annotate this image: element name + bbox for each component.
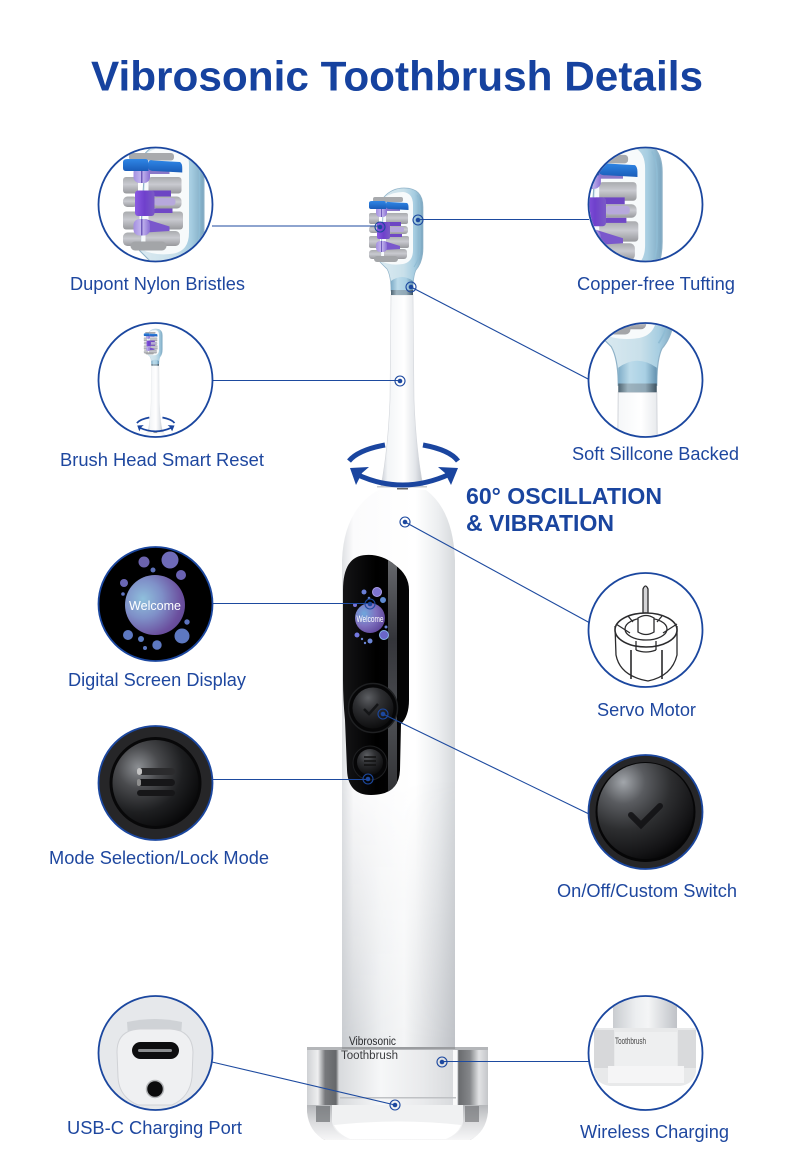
panel: usb-c charging port: USB-C Charging Port	[67, 1118, 242, 1138]
panel: on/off/custom switch: On/Off/Custom Switch	[557, 881, 737, 901]
brand text	[341, 1036, 398, 1062]
handle	[342, 490, 455, 1050]
panel: usb-c charging port	[67, 996, 242, 1138]
oscillation heading: 60° OSCILLATION	[466, 483, 662, 509]
brush stem	[377, 295, 427, 490]
panel: dupont nylon bristles: Dupont Nylon Bristles	[70, 274, 245, 294]
panel: servo motor	[588, 573, 702, 720]
panel: wireless charging: Wireless Charging	[580, 1122, 729, 1142]
panel: digital screen display	[68, 547, 246, 690]
panel: brush head smart reset: Brush Head Smart Reset	[60, 450, 264, 470]
screen welcome graphic	[353, 588, 388, 644]
panel: soft silicone backed	[572, 322, 738, 460]
brand text: Vibrosonic	[349, 1036, 396, 1048]
screen welcome graphic: Welcome	[356, 614, 384, 625]
panel: mode selection / lock mode: Mode Selection/Lock Mode	[49, 848, 269, 868]
panel: on/off/custom switch	[557, 755, 737, 901]
brand text: Toothbrush	[341, 1050, 398, 1062]
panel: wireless charging: Toothbrush	[615, 1036, 646, 1047]
toothbrush	[307, 188, 488, 1140]
panel: soft silicone backed: Soft Sillcone Backed	[572, 444, 739, 464]
panel: brush head smart reset	[62, 322, 264, 466]
oscillation heading: & VIBRATION	[466, 510, 614, 536]
panel: mode selection / lock mode	[49, 726, 269, 868]
panel: wireless charging	[580, 995, 729, 1142]
panel: servo motor: Servo Motor	[597, 700, 696, 720]
rotation arrows	[349, 445, 458, 485]
power button	[348, 684, 398, 732]
panel: digital screen display: Digital Screen Display	[68, 670, 246, 690]
panel: copper-free tufting	[578, 146, 734, 294]
panel: digital screen display: Welcome	[129, 598, 181, 613]
mode button	[353, 746, 387, 780]
charging base	[307, 1036, 488, 1140]
control panel	[343, 555, 409, 795]
oscillation heading	[466, 483, 662, 536]
leader lines	[212, 220, 590, 1105]
panel: copper-free tufting: Copper-free Tufting	[577, 274, 735, 294]
marker dots	[363, 215, 447, 1110]
brush head	[369, 188, 423, 295]
panel: dupont nylon bristles	[70, 140, 245, 300]
title: Vibrosonic Toothbrush Details	[91, 52, 703, 100]
